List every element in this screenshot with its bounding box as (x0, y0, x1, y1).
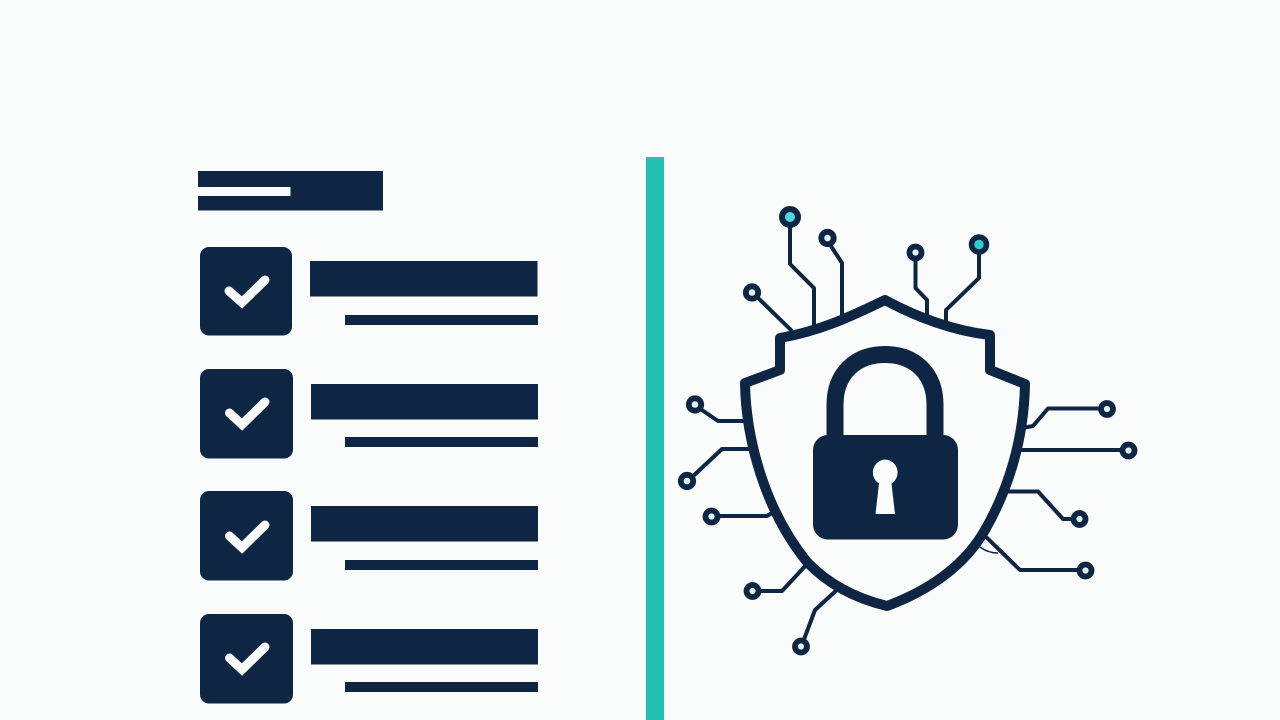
row 2 title bar (311, 384, 538, 420)
row 4 subtitle bar (345, 682, 538, 692)
padlock shackle (835, 354, 935, 450)
checklist row 4 (200, 614, 538, 704)
shield outline (745, 300, 1025, 606)
row 1 subtitle bar (345, 315, 538, 325)
top-right traces (910, 237, 986, 326)
teal vertical divider (646, 157, 664, 720)
icon: checkbox 4 (200, 614, 293, 704)
row 3 subtitle bar (345, 560, 538, 570)
padlock body (813, 435, 958, 540)
checklist (200, 247, 538, 704)
row 4 title bar (311, 629, 538, 664)
row 1 title bar (310, 261, 538, 296)
icon: checkbox 3 (200, 491, 293, 580)
icon: padlock (813, 354, 958, 540)
left traces (681, 398, 840, 652)
circuit traces (681, 209, 1134, 652)
icon: checkbox 1 (200, 247, 292, 336)
heading placeholder bar (198, 171, 383, 210)
padlock keyhole (873, 460, 898, 514)
row 2 subtitle bar (345, 437, 538, 447)
checklist row 3 (200, 491, 538, 580)
top-left traces (746, 209, 842, 331)
right traces (980, 403, 1134, 576)
icon: checkbox 2 (200, 369, 293, 458)
row 3 title bar (311, 506, 538, 542)
checklist row 1 (200, 247, 538, 336)
checklist row 2 (200, 369, 538, 458)
